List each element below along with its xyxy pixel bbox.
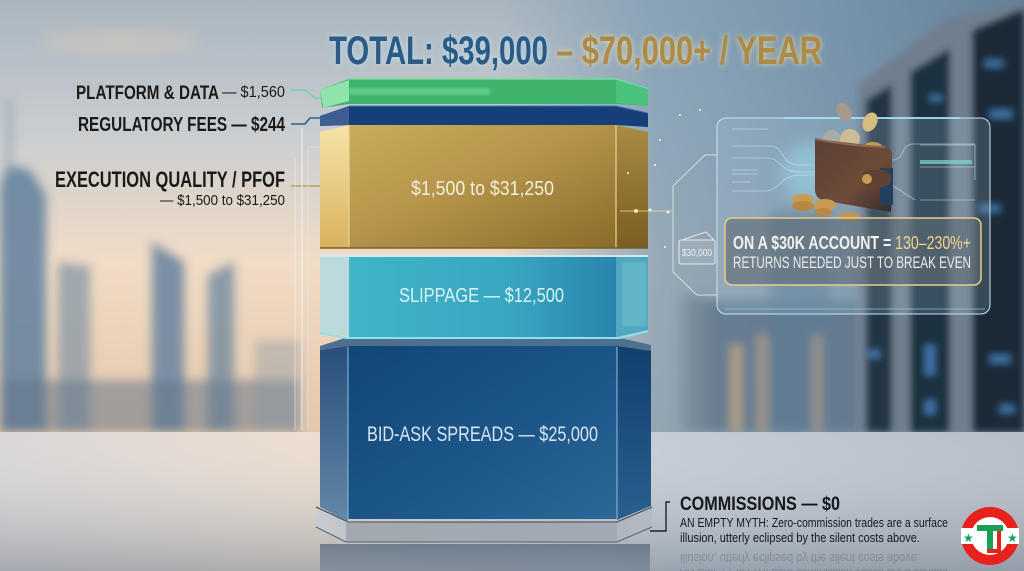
label: platform and data: PLATFORM & DATA bbox=[76, 83, 219, 104]
label: execution quality: EXECUTION QUALITY / PFOF bbox=[55, 167, 285, 192]
background: blurred city skyline bbox=[0, 0, 1024, 435]
callout reflection: illusion, utterly eclipsed by the silent costs above. bbox=[680, 551, 920, 566]
title glow bbox=[329, 29, 822, 73]
title glow: – $70,000+ / YEAR bbox=[556, 29, 822, 73]
layer: bid-ask spreads bbox=[320, 338, 651, 522]
logo badge bbox=[961, 507, 1019, 565]
title bbox=[329, 29, 822, 73]
left connector lines bbox=[291, 90, 330, 430]
table surface bbox=[0, 432, 1024, 571]
panel: faint data lines bbox=[732, 129, 975, 200]
layer: slippage: SLIPPAGE — $12,500 bbox=[399, 285, 564, 307]
sparkle trail bbox=[620, 109, 701, 248]
panel: callout box: ON A $30K ACCOUNT = 130–230%+ bbox=[733, 233, 971, 253]
label: regulatory fees: REGULATORY FEES — $244 bbox=[78, 114, 286, 136]
layer: execution quality gold block bbox=[320, 125, 648, 248]
title blue part: TOTAL: $39,000 bbox=[329, 29, 548, 73]
icon: $30,000 cash card: $30,000 bbox=[682, 248, 712, 259]
panel: $30k account break-even bbox=[717, 100, 990, 314]
title gold part: – $70,000+ / YEAR bbox=[556, 29, 822, 73]
logo badge: ★ bbox=[963, 531, 974, 545]
label: execution quality bbox=[55, 167, 285, 209]
title glow: TOTAL: $39,000 bbox=[329, 29, 548, 73]
callout: commissions empty myth: COMMISSIONS — $0 bbox=[680, 494, 840, 515]
icon: $30,000 cash card bbox=[679, 232, 715, 264]
label: execution quality: — $1,500 to $31,250 bbox=[160, 192, 285, 209]
stacked cost tower bbox=[316, 79, 652, 571]
layer: bid-ask spreads: BID-ASK SPREADS — $25,000 bbox=[367, 423, 598, 446]
callout: commissions empty myth: AN EMPTY MYTH: Zero-commission trades are a surface bbox=[680, 515, 948, 530]
callout: commissions empty myth: illusion, utterly eclipsed by the silent costs above. bbox=[680, 530, 920, 545]
logo badge: ★ bbox=[1007, 531, 1018, 545]
connector bracket to panel bbox=[673, 155, 717, 295]
panel: callout box bbox=[725, 218, 981, 285]
layer: base plate bbox=[316, 507, 652, 571]
callout: commissions empty myth bbox=[680, 494, 948, 545]
commissions bracket line bbox=[650, 502, 670, 531]
icon: wallet with coins bbox=[792, 100, 893, 222]
label: platform and data: — $1,560 bbox=[222, 84, 285, 101]
layer: slippage bbox=[320, 256, 648, 338]
layer: platform and data green slab bbox=[320, 79, 648, 108]
layer: execution quality gold block: $1,500 to $31,250 bbox=[411, 178, 554, 200]
layer: regulatory fees navy slab bbox=[320, 106, 648, 127]
